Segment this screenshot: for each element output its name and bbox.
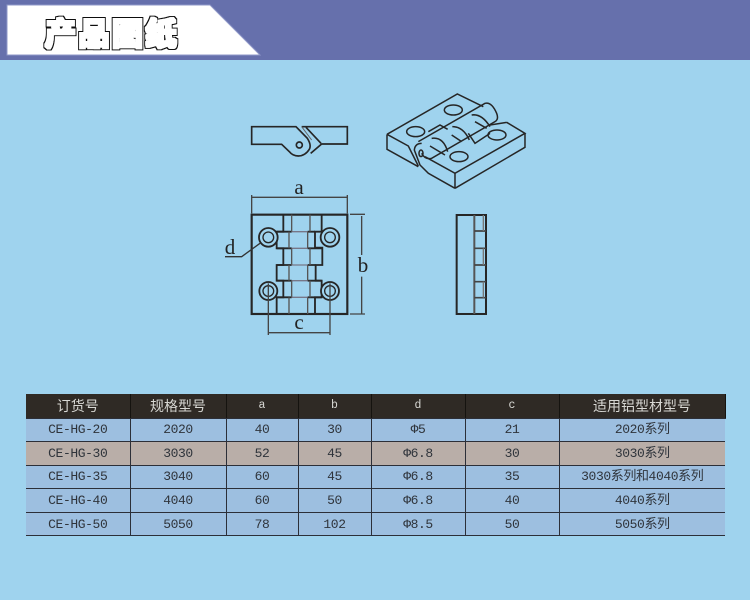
dimension label d: d bbox=[225, 235, 236, 259]
specification table: 45 bbox=[327, 469, 342, 484]
hinge outline bbox=[252, 215, 347, 314]
specification table: 60 bbox=[255, 493, 269, 508]
specification table: 规格型号 bbox=[150, 396, 206, 416]
specification table: Φ5 bbox=[411, 422, 425, 437]
specification table bbox=[26, 394, 726, 536]
specification table: 适用铝型材型号 bbox=[593, 396, 691, 416]
specification table: b bbox=[331, 399, 338, 412]
specification table: 21 bbox=[505, 422, 519, 437]
specification table: 3030系列 bbox=[615, 446, 670, 461]
specification table: CE-HG-20 bbox=[48, 422, 107, 437]
title tab bbox=[7, 5, 260, 55]
mounting holes bbox=[259, 228, 339, 300]
dimension label b: b bbox=[358, 253, 368, 277]
side view of hinge bbox=[252, 127, 347, 156]
specification table: 2020系列 bbox=[615, 422, 670, 437]
specification table: Φ6.8 bbox=[403, 469, 433, 484]
dimension lines bbox=[252, 195, 347, 213]
specification table: d bbox=[415, 399, 421, 412]
specification table: 5050 bbox=[163, 517, 193, 532]
specification table: Φ6.8 bbox=[403, 446, 433, 461]
specification table: 40 bbox=[255, 422, 269, 437]
specification table: 60 bbox=[255, 469, 269, 484]
technical drawing bbox=[225, 93, 526, 335]
title: 产品图纸 bbox=[45, 9, 179, 54]
dimension label c: c bbox=[294, 310, 304, 334]
specification table: 50 bbox=[505, 517, 519, 532]
specification table: 45 bbox=[327, 446, 342, 461]
specification table: 5050系列 bbox=[615, 517, 670, 532]
specification table: 3030系列和4040系列 bbox=[581, 469, 703, 484]
specification table: 50 bbox=[327, 493, 342, 508]
specification table: Φ6.8 bbox=[403, 493, 433, 508]
specification table: CE-HG-50 bbox=[48, 517, 107, 532]
front view of hinge with dimensions bbox=[225, 195, 365, 335]
specification table: 40 bbox=[505, 493, 519, 508]
end view of hinge bbox=[457, 215, 486, 314]
specification table: a bbox=[259, 399, 265, 412]
specification table: 4040系列 bbox=[615, 493, 670, 508]
specification table: 102 bbox=[323, 517, 346, 532]
specification table: 35 bbox=[505, 469, 519, 484]
specification table: CE-HG-40 bbox=[48, 493, 107, 508]
specification table: CE-HG-30 bbox=[48, 446, 107, 461]
specification table: 3030 bbox=[163, 446, 193, 461]
specification table: 52 bbox=[255, 446, 269, 461]
specification table: 30 bbox=[327, 422, 342, 437]
specification table: 78 bbox=[255, 517, 269, 532]
specification table: Φ8.5 bbox=[403, 517, 433, 532]
specification table: 4040 bbox=[163, 493, 193, 508]
specification table: 2020 bbox=[163, 422, 193, 437]
specification table: CE-HG-35 bbox=[48, 469, 107, 484]
specification table: c bbox=[509, 399, 515, 412]
dimension label a: a bbox=[294, 175, 304, 199]
header banner bbox=[0, 0, 750, 60]
isometric view of hinge bbox=[387, 94, 525, 188]
specification table: 订货号 bbox=[57, 396, 99, 416]
specification table: 3040 bbox=[163, 469, 193, 484]
specification table: 30 bbox=[505, 446, 519, 461]
